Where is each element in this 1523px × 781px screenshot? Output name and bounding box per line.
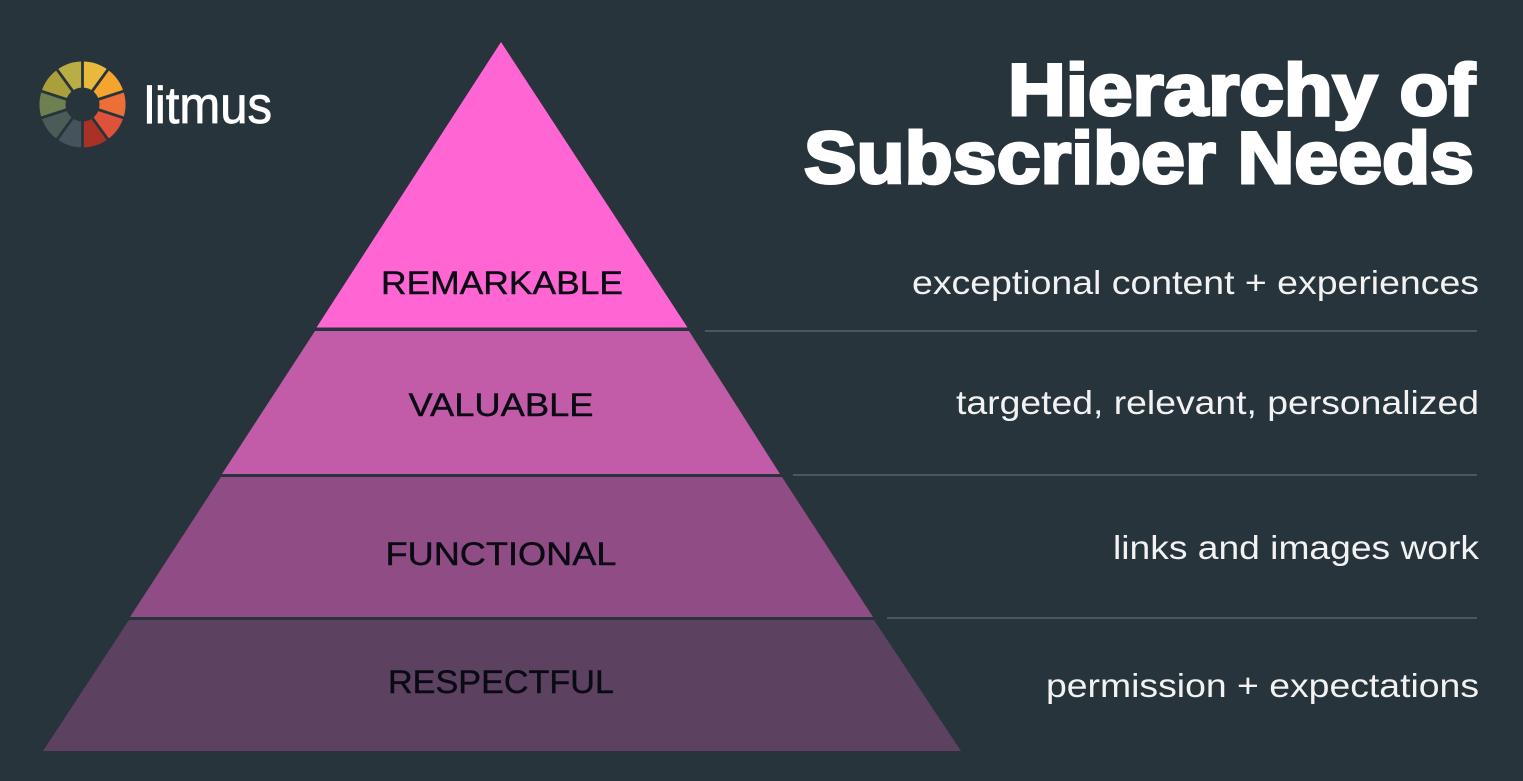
tier: valuable: VALUABLE: [408, 387, 594, 423]
tier: respectful: RESPECTFUL: [388, 664, 614, 700]
tier: remarkable: [316, 42, 688, 328]
logo wordmark: litmus: [144, 77, 272, 135]
tier: valuable: [222, 331, 780, 474]
logo: litmus: [39, 60, 272, 148]
title: Subscriber Needs: [804, 118, 1474, 199]
tier: remarkable: REMARKABLE: [381, 265, 623, 301]
icon: colour wheel: [39, 60, 126, 148]
description: remarkable: exceptional content + experiences: [912, 264, 1479, 301]
description: valuable: targeted, relevant, personalized: [956, 384, 1479, 421]
tier: functional: FUNCTIONAL: [386, 536, 616, 572]
tier: functional: [130, 477, 873, 617]
tier: respectful: [43, 620, 961, 751]
title: Hierarchy of: [1008, 50, 1476, 131]
pyramid: [43, 42, 961, 751]
description: respectful: permission + expectations: [1046, 667, 1479, 704]
description: functional: links and images work: [1113, 529, 1480, 566]
title: [804, 50, 1476, 199]
descriptions: [912, 264, 1480, 704]
